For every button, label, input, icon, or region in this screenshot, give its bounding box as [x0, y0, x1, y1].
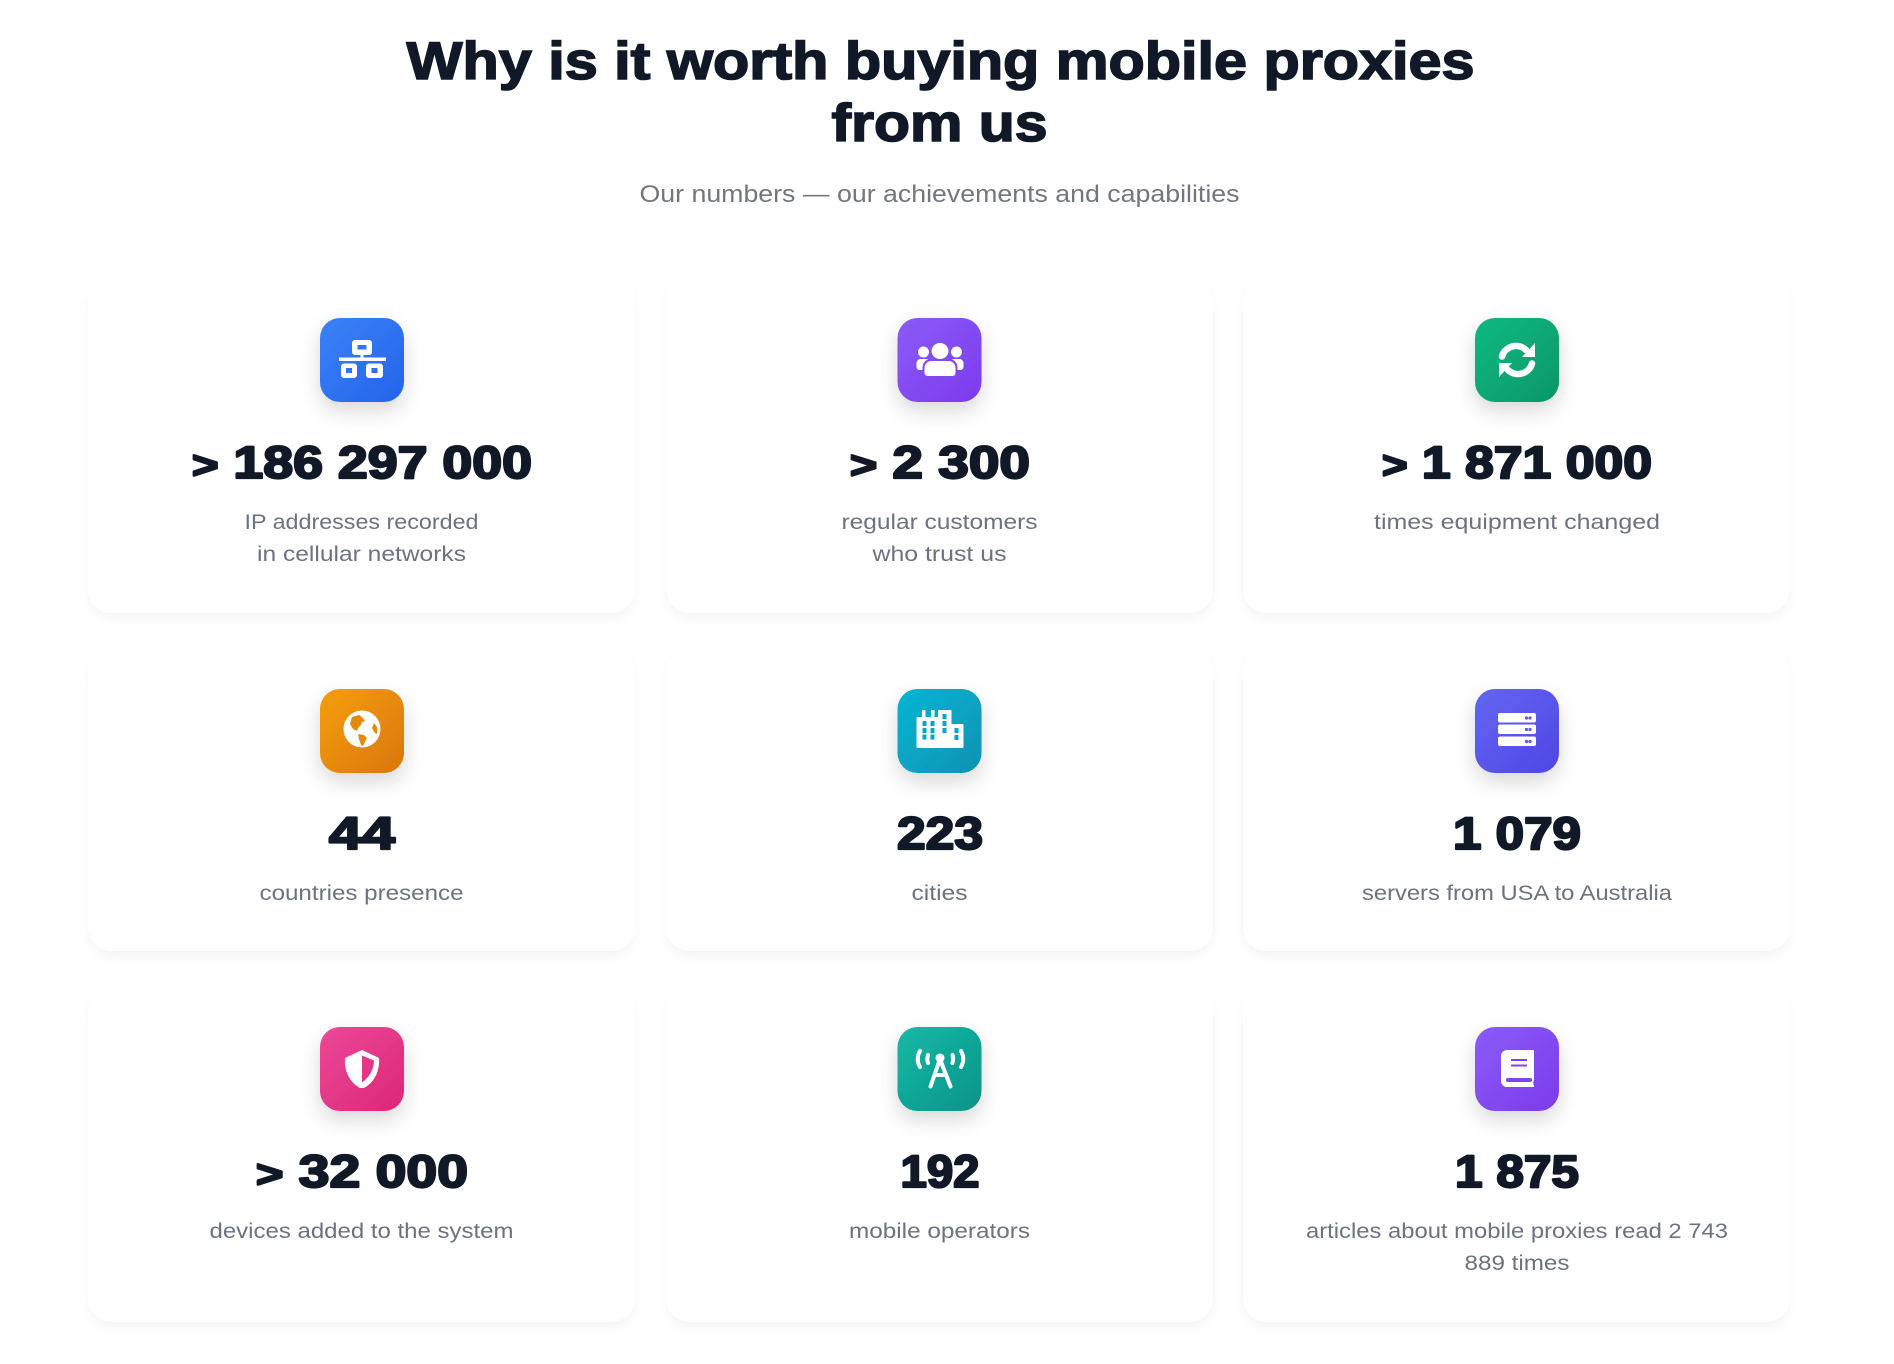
icon: tower	[898, 1027, 982, 1111]
description: in cellular networks	[257, 543, 466, 566]
icon: network	[320, 318, 404, 402]
icon: book	[1475, 1027, 1559, 1111]
number: > 32 000	[256, 1146, 468, 1197]
description	[244, 511, 478, 566]
panel: equipment	[1243, 278, 1790, 613]
subtitle: Our numbers — our achievements and capabilities	[640, 181, 1240, 208]
description: articles about mobile proxies read 2 743	[1306, 1220, 1728, 1243]
description: countries presence	[260, 882, 464, 905]
panel: servers	[1243, 649, 1790, 951]
number: 192	[900, 1146, 980, 1197]
description: servers from USA to Australia	[1362, 882, 1672, 905]
description: who trust us	[871, 543, 1006, 566]
number: > 1 871 000	[1382, 437, 1652, 488]
description: 889 times	[1464, 1252, 1570, 1275]
panel: cities	[666, 649, 1213, 951]
description: cities	[912, 882, 968, 905]
panel: countries	[88, 649, 635, 951]
number: 1 875	[1455, 1146, 1579, 1197]
number: > 186 297 000	[192, 437, 532, 488]
title	[406, 32, 1474, 153]
description: IP addresses recorded	[244, 511, 478, 534]
number: > 2 300	[850, 437, 1030, 488]
icon: city	[898, 689, 982, 773]
description: devices added to the system	[210, 1220, 514, 1243]
icon: users	[898, 318, 982, 402]
icon: refresh	[1475, 318, 1559, 402]
description: mobile operators	[849, 1220, 1030, 1243]
number: 1 079	[1453, 808, 1581, 859]
panel: operators	[666, 987, 1213, 1322]
title: Why is it worth buying mobile proxies	[406, 32, 1474, 91]
description: times equipment changed	[1374, 511, 1660, 534]
panel: articles	[1243, 987, 1790, 1322]
title: from us	[832, 94, 1048, 153]
panel: IP addresses	[88, 278, 635, 613]
description	[842, 511, 1038, 566]
number: 223	[897, 808, 983, 859]
description	[1306, 1220, 1728, 1275]
panel: devices	[88, 987, 635, 1322]
icon: server	[1475, 689, 1559, 773]
icon: globe	[320, 689, 404, 773]
description: regular customers	[842, 511, 1038, 534]
panel: customers	[666, 278, 1213, 613]
number: 44	[329, 808, 395, 859]
icon: shield	[320, 1027, 404, 1111]
